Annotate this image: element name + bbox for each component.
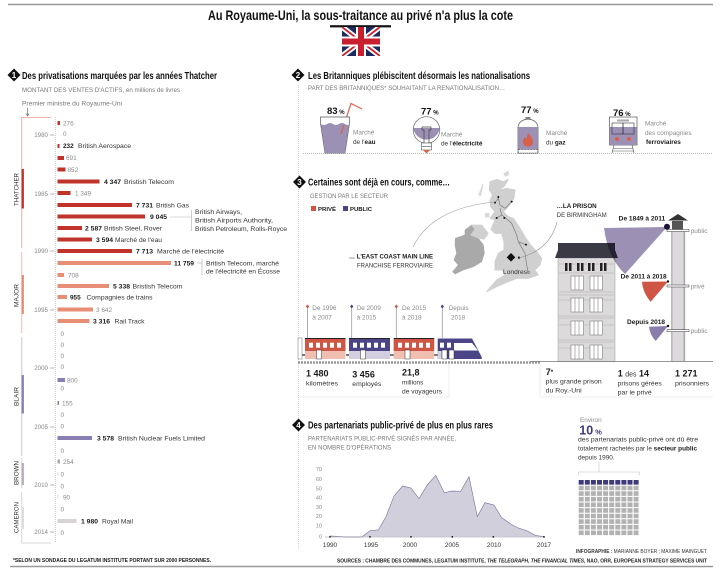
title: Au Royaume-Uni, la sous-traitance au privé n'a plus la cote xyxy=(208,7,513,23)
subtitle 3: GESTION PAR LE SECTEUR xyxy=(310,194,389,200)
bar chart: sales by year: 3 316 xyxy=(93,318,110,325)
callout: 10 percent bought back: des partenariats public-privé ont dû être xyxy=(578,437,698,444)
bar chart: sales by year: British Gas xyxy=(156,202,189,209)
stats: railway line: 3 456 xyxy=(352,370,375,380)
timeline: prime ministers: CAMERON xyxy=(14,502,20,533)
stat: gas 77%: 77 % xyxy=(521,105,539,116)
area chart: PPP deals: 2005 xyxy=(445,542,460,549)
timeline markers: operators: De 2009 xyxy=(357,305,381,312)
stats: prison: * xyxy=(551,370,554,376)
bar chart: sales by year: 7 731 xyxy=(136,202,153,209)
stats: railway line: millions xyxy=(402,379,423,386)
label: water: eau xyxy=(365,139,376,146)
callout: Birmingham prison: …LA PRISON xyxy=(557,204,597,210)
callout: Birmingham prison xyxy=(557,204,607,219)
area chart: PPP deals: 70 xyxy=(316,467,322,473)
bar chart: sales by year: British Airways, xyxy=(195,209,242,216)
bar chart: sales by year: 0 xyxy=(60,530,64,537)
stats: prison: par le privé xyxy=(618,390,652,396)
arrow: prison callout xyxy=(519,222,557,258)
bar chart: sales by year: 0 xyxy=(60,506,64,513)
bar chart: sales by year: 2 587 xyxy=(85,225,102,232)
timeline markers: operators: 2018 xyxy=(451,314,466,322)
bar chart: sales by year: 0 xyxy=(60,483,64,490)
bar chart: sales by year: 5 338 xyxy=(113,283,130,290)
legend: PRIVÉ xyxy=(318,205,336,213)
icon: gas tank xyxy=(518,117,538,153)
bar chart: sales by year: 955 xyxy=(70,294,81,301)
timeline: prime ministers: BLAIR xyxy=(14,387,20,406)
timeline markers: operators: à 2018 xyxy=(402,314,422,322)
subtitle 4: EN NOMBRE D'OPÉRATIONS xyxy=(308,444,391,452)
bar chart: sales by year: Royal Mail xyxy=(102,518,133,525)
sources: SOURCES : CHAMBRE DES COMMUNES, LEGATUM INSTITUTE, THE TELEGRAPH, THE FINANCIAL TIMES, NAO, ORR, EUROPEAN STRATEGY SERVICES UNIT xyxy=(337,558,708,564)
searchlight beam: 1849-2011 public xyxy=(604,216,708,274)
bar chart: sales by year: 0 xyxy=(60,471,64,478)
bar chart: sales by year: 852 xyxy=(68,167,79,174)
map: Britain and Ireland xyxy=(453,171,542,292)
callout: East Coast Main Line: … L'EAST COAST MAIN LINE xyxy=(349,254,433,260)
icon: train front xyxy=(610,117,637,153)
timeline markers: operators: à 2007 xyxy=(312,314,332,322)
timeline markers: operators: De 1996 xyxy=(312,305,336,312)
searchlight beam: since 2018 public: Depuis 2018 xyxy=(627,319,665,326)
area chart: PPP deals: 0 xyxy=(319,534,322,540)
stats: prison: 1 271 xyxy=(675,368,698,378)
subtitle 2: PART DES BRITANNIQUES* SOUHAITANT LA RENATIONALISATION… xyxy=(308,86,505,92)
stats: prison: 1 des 14 xyxy=(618,368,649,378)
icon: number 3 diamond: 3 xyxy=(297,178,302,187)
bar chart: sales by year: 254 xyxy=(63,459,74,466)
footnote: *SELON UN SONDAGE DU LEGATUM INSTITUTE PORTANT SUR 2000 PERSONNES. xyxy=(13,558,211,564)
label: gas: gaz xyxy=(555,140,566,146)
panel: privatisations xyxy=(8,68,287,543)
bar chart: sales by year: 0 xyxy=(60,331,64,338)
icon: union jack flag xyxy=(330,25,391,56)
bar chart: sales by year: 276 xyxy=(63,120,74,128)
timeline markers: operators: De 2015 xyxy=(402,305,426,312)
callout: East Coast Main Line xyxy=(349,254,433,270)
heading 1: Des privatisations marquées par les années Thatcher xyxy=(22,70,217,82)
stats: railway line xyxy=(298,363,449,397)
bar chart: sales by year: British Aerospace xyxy=(78,143,131,150)
icon: number 2 diamond xyxy=(292,68,304,82)
bar chart: sales by year: 0 xyxy=(60,386,64,392)
panel: nationalisations xyxy=(292,68,712,154)
bar chart: sales by year: 3 642 xyxy=(96,307,112,314)
callout: East Coast Main Line: FRANCHISE FERROVIAIRE xyxy=(357,264,433,270)
area chart: PPP deals xyxy=(316,467,552,549)
timeline: prime ministers: BROWN xyxy=(14,461,20,485)
heading 2: Les Britanniques plébiscitent désormais les nationalisations xyxy=(308,70,530,82)
legend: PUBLIC xyxy=(350,207,373,213)
timeline markers: operators: Depuis xyxy=(449,305,469,312)
bar chart: sales by year: 7 713 xyxy=(136,248,153,255)
stats: railway line: 21,8 xyxy=(402,368,420,378)
stats: prison: du Roy.-Uni xyxy=(546,388,582,394)
stats: prison xyxy=(540,363,713,397)
bar chart: sales by year: Marché de l'eau xyxy=(115,237,162,244)
callout: 10 percent bought back: Environ xyxy=(580,417,602,424)
area chart: PPP deals: 60 xyxy=(316,477,322,483)
bar chart: sales by year: 0 xyxy=(60,364,64,371)
callout: 10 percent bought back: 10 % xyxy=(579,424,602,438)
heading 3: Certaines sont déjà en cours, comme… xyxy=(308,176,450,188)
year axis: 1980 xyxy=(34,132,49,139)
stat: water 83%: 83 % xyxy=(327,106,345,117)
label: railways: ferroviaires xyxy=(646,139,681,146)
bar chart: sales by year: 9 045 xyxy=(150,214,167,221)
area chart: PPP deals: 2010 xyxy=(487,542,502,549)
stats: prison: 7 xyxy=(546,367,551,377)
icon: glass of water xyxy=(320,104,362,153)
label: electricity: Marché xyxy=(441,132,462,138)
label: electricity: électricité xyxy=(453,140,483,148)
area chart: PPP deals: 1995 xyxy=(364,542,379,549)
bar chart: sales by year: British Steel, Rover xyxy=(104,225,163,232)
label: electricity: de l' xyxy=(441,140,453,148)
year axis xyxy=(34,117,56,543)
stats: prison: prisonniers xyxy=(675,380,709,388)
bar chart: sales by year: Bristish Telecom xyxy=(124,179,174,186)
subtitle 4: PARTENARIATS PUBLIC-PRIVÉ SIGNÉS PAR ANNÉE, xyxy=(308,436,456,442)
icon: number 1 diamond xyxy=(8,68,20,82)
bar chart: sales by year: Rail Track xyxy=(114,318,145,325)
label: railways: Marché xyxy=(645,120,666,128)
bar chart: sales by year: Marché de l'électricité xyxy=(157,248,224,255)
illustration: watchtower xyxy=(667,214,689,362)
bar chart: sales by year: 0 xyxy=(60,423,64,430)
bar chart: sales by year: de l'électricité en Écosse xyxy=(206,267,280,276)
stat: electricity 77%: 77 % xyxy=(421,107,439,118)
arrow: East Coast line callout xyxy=(413,202,495,247)
icon: number 1 diamond: 1 xyxy=(12,71,17,80)
timeline markers: operators xyxy=(306,304,469,338)
area chart: PPP deals: 40 xyxy=(316,496,322,502)
area chart: PPP deals: 20 xyxy=(316,514,322,520)
icon: number 3 diamond xyxy=(293,176,306,188)
icon: number 4 diamond xyxy=(292,418,305,432)
legend xyxy=(311,205,373,213)
train: East Coast Main Line xyxy=(298,338,540,362)
timeline: prime ministers xyxy=(14,117,51,543)
icon: light bulb xyxy=(413,117,440,154)
label: gas: du xyxy=(546,140,555,146)
searchlight beam: 1849-2011 public: De 1849 à 2011 xyxy=(619,216,666,222)
callout: 10 percent bought back xyxy=(578,417,698,462)
label: railways: des compagnies xyxy=(645,130,692,137)
year axis: 1990 xyxy=(34,248,49,255)
callout: Birmingham prison: DE BIRMINGHAM xyxy=(557,213,607,219)
area chart: PPP deals: 30 xyxy=(316,505,322,511)
timeline: prime ministers: MAJOR xyxy=(14,284,20,307)
stats: prison: prisons gérées xyxy=(618,380,662,388)
timeline markers: operators: à 2015 xyxy=(357,314,377,322)
year axis: 1995 xyxy=(34,307,49,314)
searchlight beam: 1849-2011 public: public xyxy=(691,228,708,235)
bar chart: sales by year: 11 759 xyxy=(174,260,194,267)
callout: 10 percent bought back: depuis 1990. xyxy=(578,455,615,462)
area chart: PPP deals: 50 xyxy=(316,486,322,492)
icon: number 4 diamond: 4 xyxy=(296,421,301,430)
label: water: de l' xyxy=(353,139,365,146)
bar chart: sales by year: 3 594 xyxy=(96,237,113,244)
searchlight beam: since 2018 public xyxy=(627,319,708,341)
stats: prison: plus grande prison xyxy=(546,378,602,386)
bar chart: sales by year: British Telecom, marché xyxy=(206,260,279,267)
year axis: 2010 xyxy=(34,482,49,489)
year axis: 2005 xyxy=(34,424,49,431)
bar chart: sales by year: 800 xyxy=(67,378,78,384)
bar chart: sales by year: 4 347 xyxy=(104,179,121,186)
bar chart: sales by year: 232 xyxy=(63,143,74,150)
stats: railway line: employés xyxy=(352,381,381,388)
label: Londres: Londres xyxy=(503,269,527,276)
area chart: PPP deals: 10 xyxy=(316,524,322,530)
icon: number 2 diamond: 2 xyxy=(296,71,301,80)
area chart: PPP deals: 1990 xyxy=(323,542,338,549)
searchlight beam: 2011-2018 private xyxy=(621,274,705,302)
bar chart: sales by year: British Airports Authority, xyxy=(195,218,273,224)
bar chart: sales by year: 1 349 xyxy=(75,190,91,198)
bar chart: sales by year: 691 xyxy=(66,155,77,162)
bar chart: sales by year: 3 578 xyxy=(97,435,114,442)
searchlight beam: 2011-2018 private: privé xyxy=(691,284,705,290)
label: gas: Marché xyxy=(546,130,567,137)
stats: railway line: de voyageurs xyxy=(402,388,442,396)
timeline: prime ministers: THATCHER xyxy=(14,173,20,206)
searchlight beam: since 2018 public: public xyxy=(691,328,708,335)
stats: railway line: kilomètres xyxy=(306,380,338,387)
area chart: PPP deals: 2017 xyxy=(537,542,552,549)
year axis: 2000 xyxy=(34,365,49,372)
stats: railway line: 1 480 xyxy=(306,368,329,378)
bar chart: sales by year xyxy=(58,120,287,537)
bar chart: sales by year: 708 xyxy=(68,272,79,279)
waffle chart: 10 percent xyxy=(578,462,640,535)
illustration: Birmingham prison building xyxy=(555,243,618,362)
stat: railways 76%: 76 % xyxy=(613,108,631,119)
bar chart: sales by year: British Nuclear Fuels Limited xyxy=(118,435,205,442)
bar chart: sales by year: 90 xyxy=(63,494,71,501)
year axis: 2014 xyxy=(34,529,49,536)
arrow: prime minister xyxy=(26,108,29,116)
panel: public-private partnerships xyxy=(292,417,698,549)
bar chart: sales by year: Bristish Telecom xyxy=(132,283,182,290)
bar chart: sales by year: 0 xyxy=(60,353,64,360)
subtitle 1: MONTANT DES VENTES D'ACTIFS, en millions de livres xyxy=(22,88,180,94)
bar chart: sales by year: 0 xyxy=(60,448,64,455)
panel: already under way xyxy=(293,171,713,397)
subtitle 4 xyxy=(308,436,456,452)
label: water: Marché xyxy=(353,130,374,136)
prime minister legend: Premier ministre du Royaume-Uni xyxy=(22,102,122,108)
bar chart: sales by year: Compagnies de trains xyxy=(86,294,152,301)
bar chart: sales by year: 0 xyxy=(60,342,64,349)
year axis: 1985 xyxy=(34,191,49,198)
bar chart: sales by year: 0 xyxy=(60,412,64,419)
bar chart: sales by year: 0 xyxy=(63,131,67,138)
bar chart: sales by year: 155 xyxy=(62,400,73,407)
searchlight beam: 2011-2018 private: De 2011 à 2018 xyxy=(621,274,667,280)
area chart: PPP deals: 2000 xyxy=(403,542,418,549)
bar chart: sales by year: 1 980 xyxy=(81,518,98,525)
callout: 10 percent bought back: totalement rachetés par le secteur public xyxy=(578,446,697,453)
credits: INFOGRAPHIE : MARIANNE BOYER ; MAXIME MAINGUET xyxy=(576,549,708,555)
bar chart: sales by year: British Petroleum, Rolls-Royce xyxy=(195,226,287,233)
heading 4: Des partenariats public-privé de plus en plus rares xyxy=(308,420,493,432)
